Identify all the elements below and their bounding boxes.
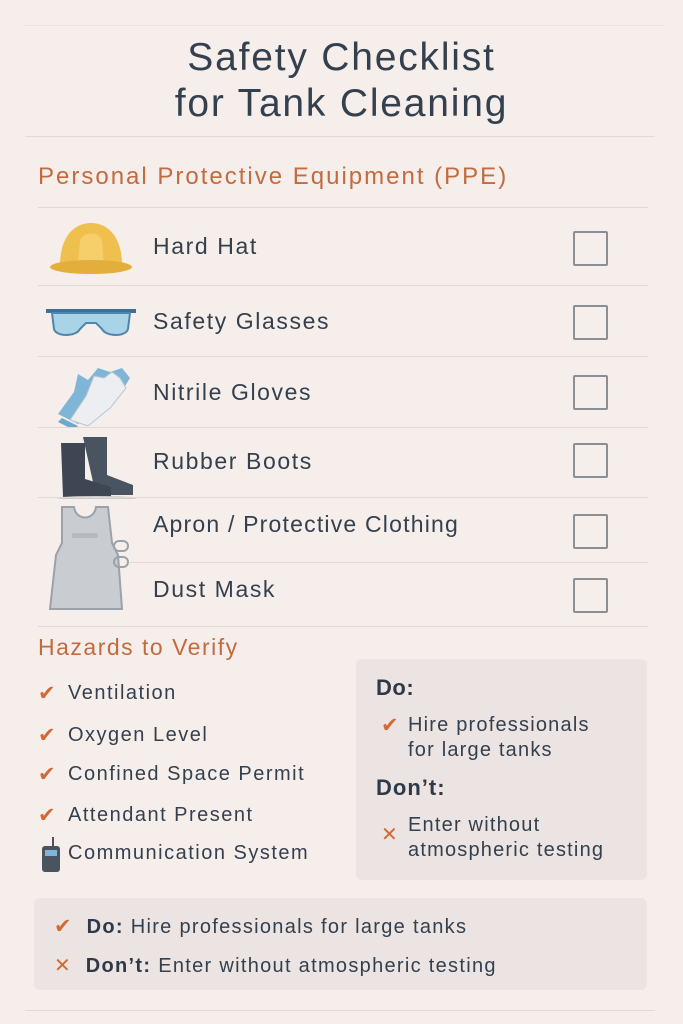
heading: PPE: Personal Protective Equipment (PPE) [38, 163, 508, 190]
title: Safety Checklist [187, 36, 496, 79]
checkbox [573, 305, 608, 340]
panel: do/don't box: ✕ [381, 824, 399, 846]
text: Rubber Boots: Rubber Boots [153, 448, 313, 474]
icon: rubber boots [57, 437, 137, 499]
text: Safety Glasses: Safety Glasses [153, 308, 330, 334]
item: do [381, 714, 590, 761]
checkbox [573, 231, 608, 266]
checkbox [573, 578, 608, 613]
item: communication [42, 837, 309, 872]
icon: hard hat [50, 223, 132, 274]
panel: PPE list [38, 223, 648, 613]
panel: hazard list: Ventilation [68, 682, 177, 704]
panel: do/don't box: Hire professionals [408, 714, 590, 736]
item: dont: ✕ Don’t: Enter without atmospheric testing [54, 955, 497, 977]
checkbox [573, 375, 608, 410]
text: Nitrile Gloves: Nitrile Gloves [153, 379, 312, 405]
text: Dust Mask: Dust Mask [153, 576, 276, 602]
item: ventilation [38, 682, 177, 705]
checkbox [573, 443, 608, 478]
panel: do/don't box: Enter without [408, 814, 540, 836]
panel: do/don't box [356, 659, 647, 880]
icon: gloves [58, 368, 130, 427]
item: attendant: ✔ [38, 804, 57, 827]
item: oxygen: ✔ [38, 724, 57, 747]
item: permit [38, 763, 305, 786]
panel: hazard list: Oxygen Level [68, 724, 208, 746]
item: do: ✔ Do: Hire professionals for large tanks [54, 915, 467, 938]
panel: bottom summary [34, 898, 647, 990]
item: attendant [38, 804, 254, 827]
checkbox [573, 514, 608, 549]
heading: Do: Do: [376, 675, 414, 700]
text: Hard Hat: Hard Hat [153, 233, 258, 259]
item: ventilation: ✔ [38, 682, 57, 705]
item: communication: Communication System [68, 842, 309, 864]
item: dont [381, 814, 604, 861]
panel: do/don't box: atmospheric testing [408, 839, 604, 861]
panel: hazard list: Attendant Present [68, 804, 254, 826]
title [175, 36, 508, 125]
panel: do/don't box: ✔ [381, 714, 400, 737]
panel: hazard list [38, 682, 309, 872]
heading: Don't: Don’t: [376, 775, 446, 800]
title: for Tank Cleaning [175, 82, 508, 125]
panel: hazard list: Confined Space Permit [68, 763, 305, 785]
item: oxygen [38, 724, 208, 747]
text: Apron: Apron / Protective Clothing [153, 511, 459, 537]
panel: do/don't box: for large tanks [408, 739, 553, 761]
item: permit: ✔ [38, 763, 57, 786]
heading: hazards: Hazards to Verify [38, 634, 239, 660]
icon: safety glasses [46, 309, 136, 336]
icon: apron [48, 506, 129, 610]
